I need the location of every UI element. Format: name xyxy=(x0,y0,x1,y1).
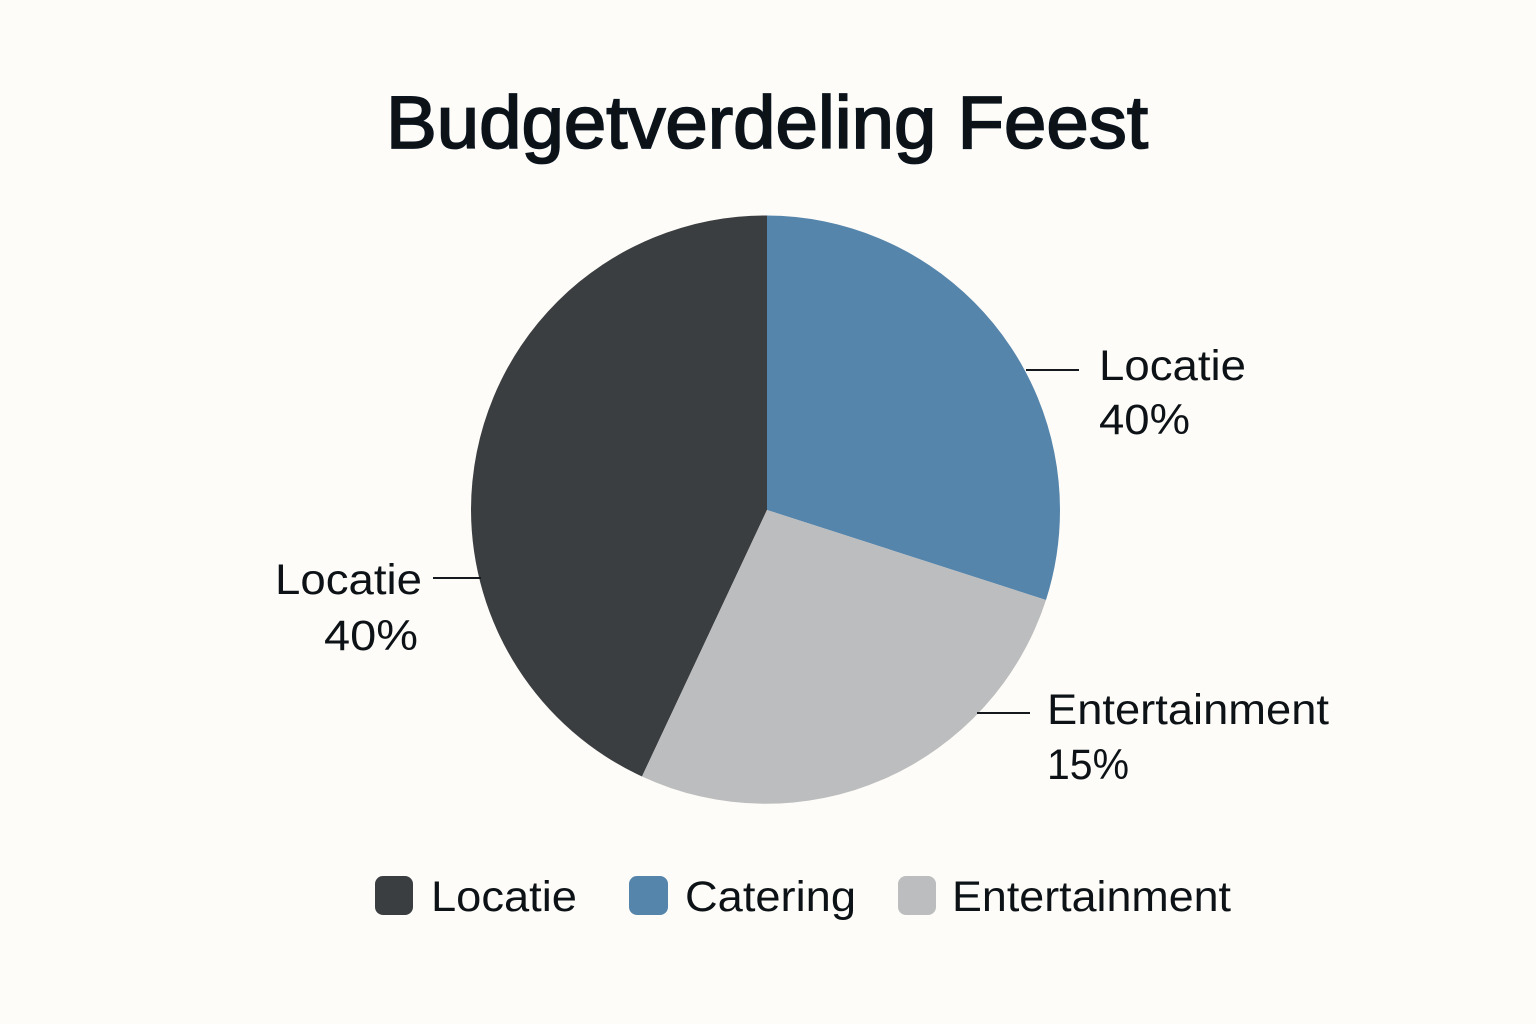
callout: Entertainment 15% xyxy=(977,686,1329,789)
legend item: Entertainment: Entertainment xyxy=(952,873,1231,921)
slice: Catering (blue) xyxy=(767,216,1060,600)
slice: Entertainment (gray) xyxy=(642,510,1046,804)
callout: Entertainment 15%: 15% xyxy=(1047,741,1129,789)
callout: left Locatie 40% xyxy=(275,556,481,660)
title: Budgetverdeling Feest xyxy=(386,81,1148,164)
slice: Locatie (dark) xyxy=(471,215,767,777)
callout: Entertainment 15%: Entertainment xyxy=(1047,686,1329,734)
legend item: Catering: Catering xyxy=(685,873,856,921)
callout: left Locatie 40%: 40% xyxy=(324,612,418,660)
callout: upper right Locatie 40% xyxy=(1026,342,1246,444)
legend xyxy=(375,873,1231,921)
pie chart xyxy=(471,215,1060,804)
legend item: Locatie xyxy=(375,873,577,921)
legend item: Locatie: Locatie xyxy=(431,873,577,921)
callout: upper right Locatie 40%: Locatie xyxy=(1099,342,1246,390)
callout: left Locatie 40%: Locatie xyxy=(275,556,422,604)
callout: upper right Locatie 40%: 40% xyxy=(1099,396,1190,444)
